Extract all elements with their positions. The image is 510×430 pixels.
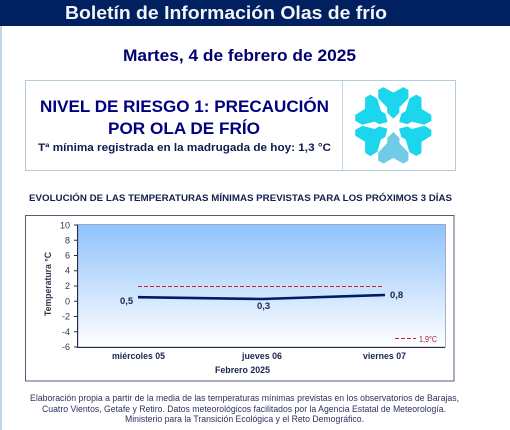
y axis labels: 10 <box>60 220 70 230</box>
data labels <box>120 290 403 312</box>
risk level heading <box>40 97 329 138</box>
y axis labels: -6 <box>62 342 70 352</box>
forecast line <box>138 295 385 299</box>
minimum temperature note: Tª mínima registrada en la madrugada de hoy: 1,3 °C <box>38 142 331 154</box>
source note: Ministerio para la Transición Ecológica y el Reto Demográfico. <box>125 414 364 424</box>
line chart: minimum temperatures <box>26 216 454 381</box>
data labels: 0,3 <box>257 301 270 312</box>
date heading: Martes, 4 de febrero de 2025 <box>123 46 356 65</box>
x axis labels: miércoles 05 <box>112 351 166 362</box>
data labels: 0,8 <box>390 290 403 301</box>
panel: risk level <box>26 80 456 170</box>
threshold dashed line <box>138 286 383 288</box>
y axis labels: 0 <box>65 296 70 306</box>
chart heading: EVOLUCIÓN DE LAS TEMPERATURAS MÍNIMAS PREVISTAS PARA LOS PRÓXIMOS 3 DÍAS <box>29 192 452 203</box>
y axis labels: 4 <box>65 266 70 276</box>
plot area <box>78 224 446 347</box>
source note <box>30 393 459 424</box>
data labels: 0,5 <box>120 296 134 307</box>
y axis labels: 8 <box>65 236 70 246</box>
y axis labels <box>60 220 70 352</box>
header banner <box>0 0 510 26</box>
source note: Elaboración propia a partir de la media de las temperaturas mínimas previstas en los observatorios de Barajas, <box>30 393 459 403</box>
risk level heading: POR OLA DE FRÍO <box>108 119 260 138</box>
x axis labels: jueves 06 <box>241 351 282 362</box>
y axis labels: -4 <box>62 327 70 337</box>
icon: snowflake <box>354 88 433 163</box>
y axis labels: -2 <box>62 312 70 322</box>
x axis labels: viernes 07 <box>363 351 406 362</box>
legend: threshold: 1,9°C <box>419 334 437 344</box>
y axis labels: 2 <box>65 281 70 291</box>
x axis labels <box>112 351 406 376</box>
y axis title: Temperatura °C <box>43 252 54 316</box>
legend: threshold <box>395 334 437 344</box>
x axis title: Febrero 2025 <box>215 365 271 376</box>
y axis labels: 6 <box>65 250 70 260</box>
header banner: Boletín de Información Olas de frío <box>65 2 387 23</box>
source note: Cuatro Vientos, Getafe y Retiro. Datos meteorológicos facilitados por la Agencia Estatal de Meteorología. <box>42 404 446 414</box>
risk level heading: NIVEL DE RIESGO 1: PRECAUCIÓN <box>40 97 329 116</box>
